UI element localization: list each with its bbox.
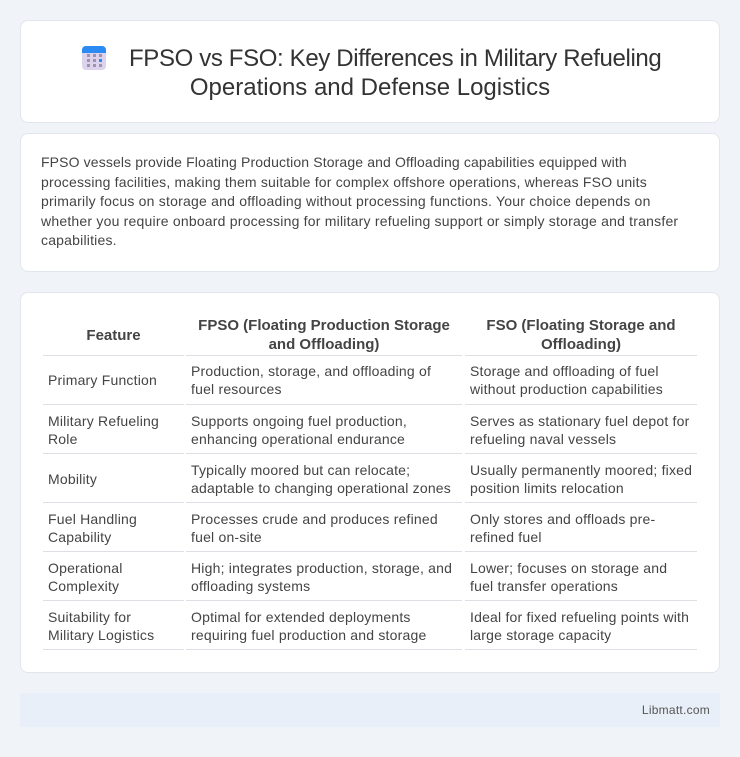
- table: Serves as stationary fuel depot for: [470, 413, 689, 429]
- table card: [20, 292, 720, 673]
- row: suitability: Suitability for: [48, 609, 131, 625]
- title card: [20, 20, 720, 123]
- table: Only stores and offloads pre-: [470, 511, 655, 527]
- intro text: FPSO vessels provide Floating Production Storage and Offloading capabilities equipped with: [41, 154, 627, 170]
- table: refueling naval vessels: [470, 431, 616, 447]
- table: Usually permanently moored; fixed: [470, 462, 692, 478]
- table: fuel on-site: [191, 529, 262, 545]
- table: Processes crude and produces refined: [191, 511, 438, 527]
- row: primary function: Primary Function: [48, 372, 157, 388]
- table: Optimal for extended deployments: [191, 609, 411, 625]
- row: operational complexity: [48, 560, 123, 594]
- row: mobility: Mobility: [48, 471, 97, 487]
- table: FPSO (Floating Production Storage: [198, 317, 450, 334]
- row: military refueling role: [48, 413, 159, 447]
- row: military refueling role: Military Refueling: [48, 413, 159, 429]
- table: requiring fuel production and storage: [191, 627, 426, 643]
- intro text: processing facilities, making them suitable for complex offshore operations, whereas FSO units: [41, 174, 647, 190]
- table: Production, storage, and offloading of: [191, 363, 431, 379]
- table: Supports ongoing fuel production,: [191, 413, 407, 429]
- table: High; integrates production, storage, and: [191, 560, 452, 576]
- icon: calendar: [82, 46, 106, 70]
- intro text: whether you require onboard processing for military refueling support or simply storage and transfer: [41, 213, 678, 229]
- intro card: [20, 133, 720, 272]
- row: operational complexity: Operational: [48, 560, 123, 576]
- table: offloading systems: [191, 578, 310, 594]
- row: fuel handling: [48, 511, 137, 545]
- table: Lower; focuses on storage and: [470, 560, 667, 576]
- footer text: Libmatt.com: [642, 703, 710, 717]
- table: FSO (Floating Storage and: [486, 317, 676, 334]
- table: fuel resources: [191, 381, 282, 397]
- heading: [129, 45, 661, 101]
- row: operational complexity: Complexity: [48, 578, 119, 594]
- table: and Offloading): [269, 336, 379, 353]
- intro text: [41, 154, 678, 248]
- table: without production capabilities: [470, 381, 663, 397]
- table: large storage capacity: [470, 627, 611, 643]
- heading: Operations and Defense Logistics: [190, 74, 550, 101]
- table: Typically moored but can relocate;: [191, 462, 410, 478]
- header row: Feature: [86, 327, 141, 344]
- table: Storage and offloading of fuel: [470, 363, 659, 379]
- table: Ideal for fixed refueling points with: [470, 609, 689, 625]
- row: fuel handling: Fuel Handling: [48, 511, 137, 527]
- heading: FPSO vs FSO: Key Differences in Military Refueling: [129, 45, 661, 72]
- table: position limits relocation: [470, 480, 624, 496]
- table: refined fuel: [470, 529, 542, 545]
- intro text: capabilities.: [41, 232, 117, 248]
- table: fuel transfer operations: [470, 578, 618, 594]
- row: fuel handling: Capability: [48, 529, 111, 545]
- table: Offloading): [541, 336, 621, 353]
- footer bar: [20, 693, 720, 727]
- row: suitability: Military Logistics: [48, 627, 154, 643]
- intro text: primarily focus on storage and offloading without processing functions. Your choice depends on: [41, 193, 651, 209]
- table: enhancing operational endurance: [191, 431, 405, 447]
- row: suitability: [48, 609, 154, 643]
- row: military refueling role: Role: [48, 431, 78, 447]
- table: adaptable to changing operational zones: [191, 480, 451, 496]
